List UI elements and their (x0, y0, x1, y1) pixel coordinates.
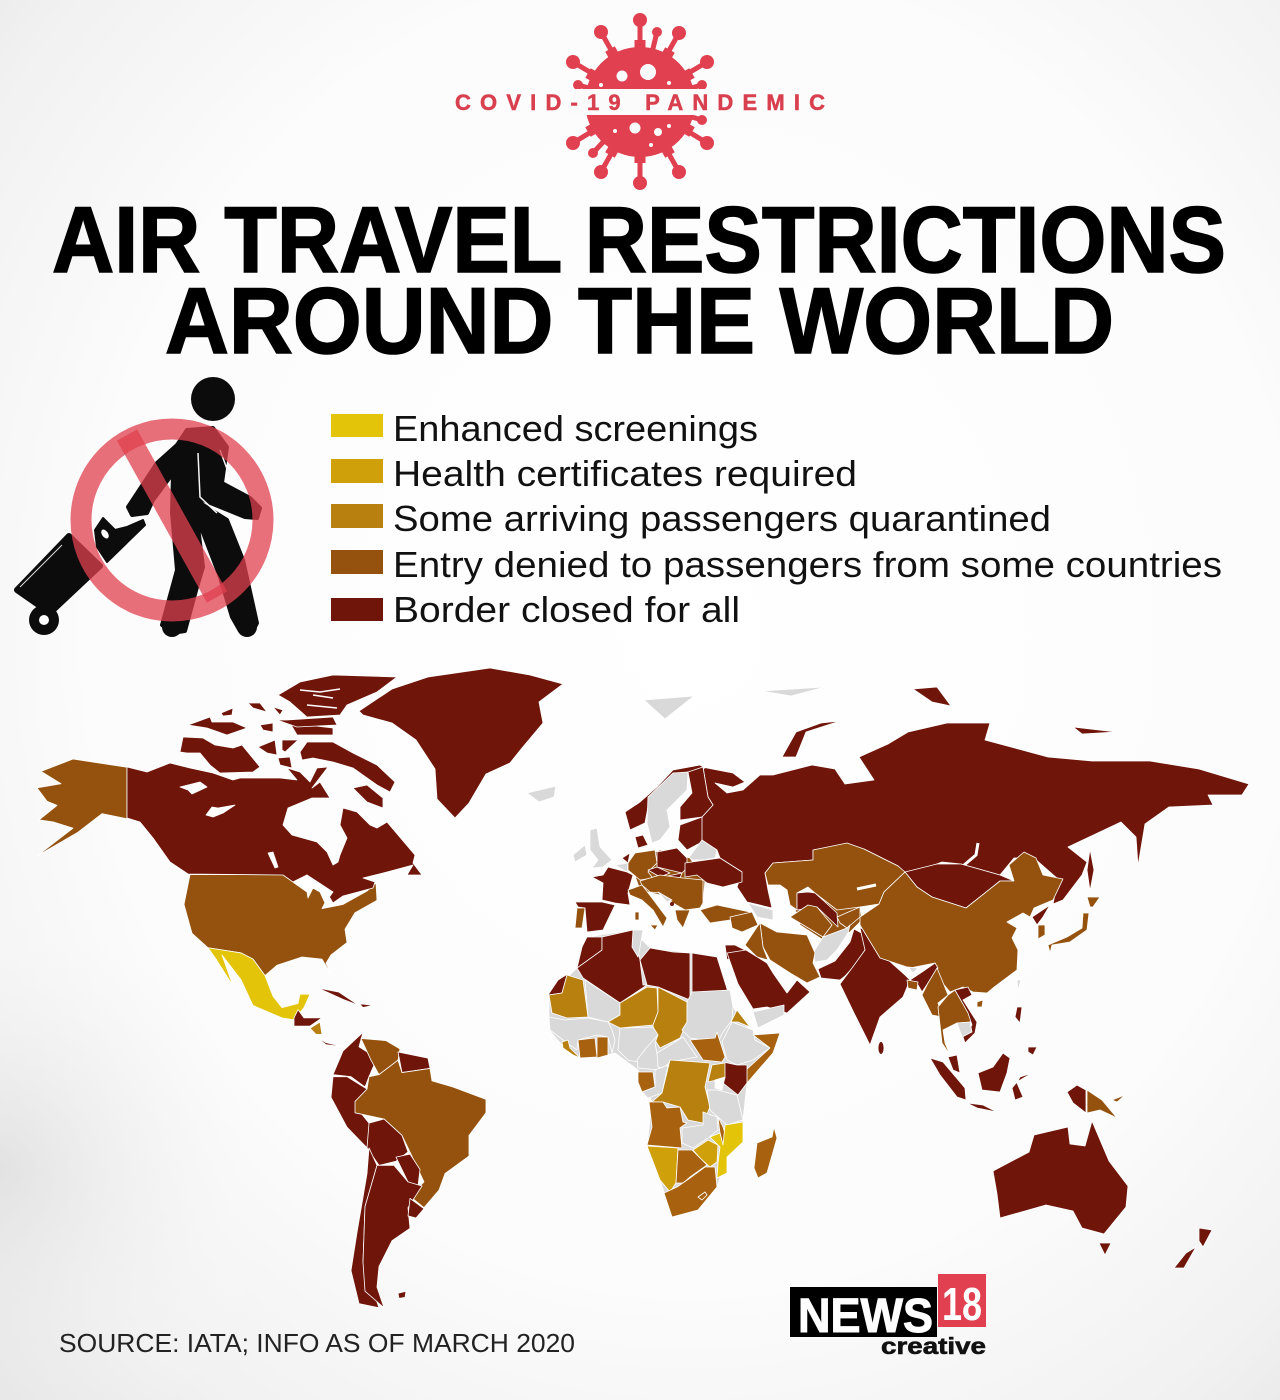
world map (37, 668, 1249, 1308)
icon: coronavirus with heading label: COVID-19 PANDEMIC (455, 90, 825, 115)
legend item: border closed: Border closed for all (393, 589, 740, 630)
map: Africa (548, 930, 780, 1217)
legend item: some quarantined: Some arriving passengers quarantined (393, 498, 1051, 539)
map: Canada and Greenland (127, 668, 563, 903)
title (52, 187, 1226, 373)
map: Alaska, USA, Central and South America (37, 759, 486, 1308)
logo: News18 creative (790, 1274, 986, 1359)
logo: News18 creative: creative (881, 1333, 986, 1359)
source note: SOURCE: IATA; INFO AS OF MARCH 2020 (59, 1328, 575, 1358)
map: Oceania (993, 1121, 1212, 1268)
legend item: health certificates: Health certificates required (393, 453, 857, 494)
map: Russia and Asia (644, 687, 1249, 1118)
legend (331, 408, 1222, 630)
legend item: entry denied: Entry denied to passengers from some countries (393, 544, 1222, 585)
logo: News18 creative: 18 (942, 1278, 982, 1330)
title: AROUND THE WORLD (165, 268, 1114, 373)
icon: no-travel sign with traveller and suitcase (17, 377, 263, 637)
map: Europe (527, 765, 742, 932)
icon: coronavirus with heading label (455, 13, 825, 190)
legend item: enhanced screenings: Enhanced screenings (393, 408, 758, 449)
logo: News18 creative: NEWS (798, 1290, 933, 1343)
